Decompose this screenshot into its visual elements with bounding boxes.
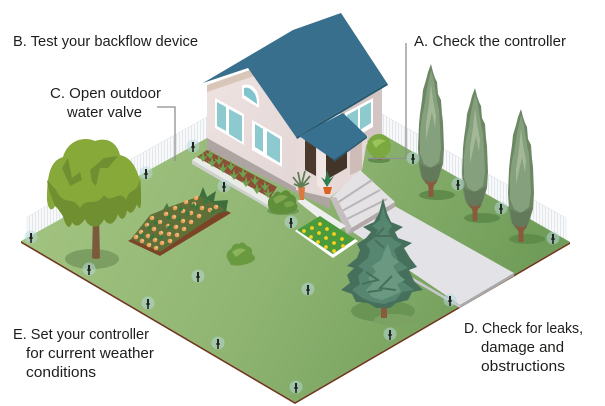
topiary tree — [367, 134, 391, 163]
window: left large — [215, 98, 244, 145]
porch — [296, 135, 368, 198]
label D: obstructions — [481, 358, 565, 375]
label C: water valve — [66, 104, 142, 121]
front wall — [207, 70, 304, 192]
right side wall — [340, 88, 382, 160]
fence: right back — [382, 114, 566, 242]
spruce dark silhouette — [341, 198, 423, 308]
label C: C. Open outdoor — [50, 85, 161, 102]
sprinkler heads — [24, 140, 560, 394]
pot right — [321, 170, 334, 194]
willow tree — [47, 139, 141, 269]
leader line: A to controller — [368, 43, 406, 158]
label D: D. Check for leaks, — [464, 320, 583, 337]
roof eave — [296, 83, 388, 139]
cypress trees — [418, 64, 545, 244]
label E: for current weather — [26, 345, 154, 362]
porch roof — [299, 113, 367, 160]
lawn with brown edging — [21, 134, 570, 404]
walkway — [347, 204, 514, 308]
flower bed: yellow — [295, 216, 358, 258]
window: right large — [252, 120, 282, 167]
flower bed: large — [128, 187, 231, 256]
shadow and tree 3 — [508, 109, 545, 244]
back fences — [27, 114, 566, 242]
label B: B. Test your backflow device — [13, 33, 198, 50]
shrub on lawn — [227, 242, 255, 266]
planter bed — [192, 148, 277, 208]
steps — [297, 170, 395, 235]
house — [203, 13, 388, 209]
right window — [345, 98, 373, 143]
potted plants — [293, 170, 334, 200]
label A: A. Check the controller — [414, 33, 566, 50]
main roof — [203, 13, 387, 137]
shadow and tree 1 — [418, 64, 455, 200]
pot left — [293, 171, 310, 200]
spruce light foliage — [366, 244, 405, 300]
label E: E. Set your controller — [13, 326, 149, 343]
spruce mid foliage — [352, 206, 414, 304]
spruce tree — [341, 198, 423, 326]
label D — [464, 320, 583, 375]
fence: left back — [27, 117, 207, 240]
upper band under roof — [207, 70, 254, 92]
arched window — [242, 85, 259, 108]
foundation — [207, 138, 330, 209]
label E — [13, 326, 154, 381]
bush near house — [267, 190, 299, 215]
label E: conditions — [26, 364, 96, 381]
leader line: C to valve — [157, 107, 175, 161]
label D: damage and — [481, 339, 564, 356]
shadow and tree 2 — [462, 88, 500, 223]
label C — [50, 85, 161, 121]
spruce shading strokes — [362, 228, 396, 292]
